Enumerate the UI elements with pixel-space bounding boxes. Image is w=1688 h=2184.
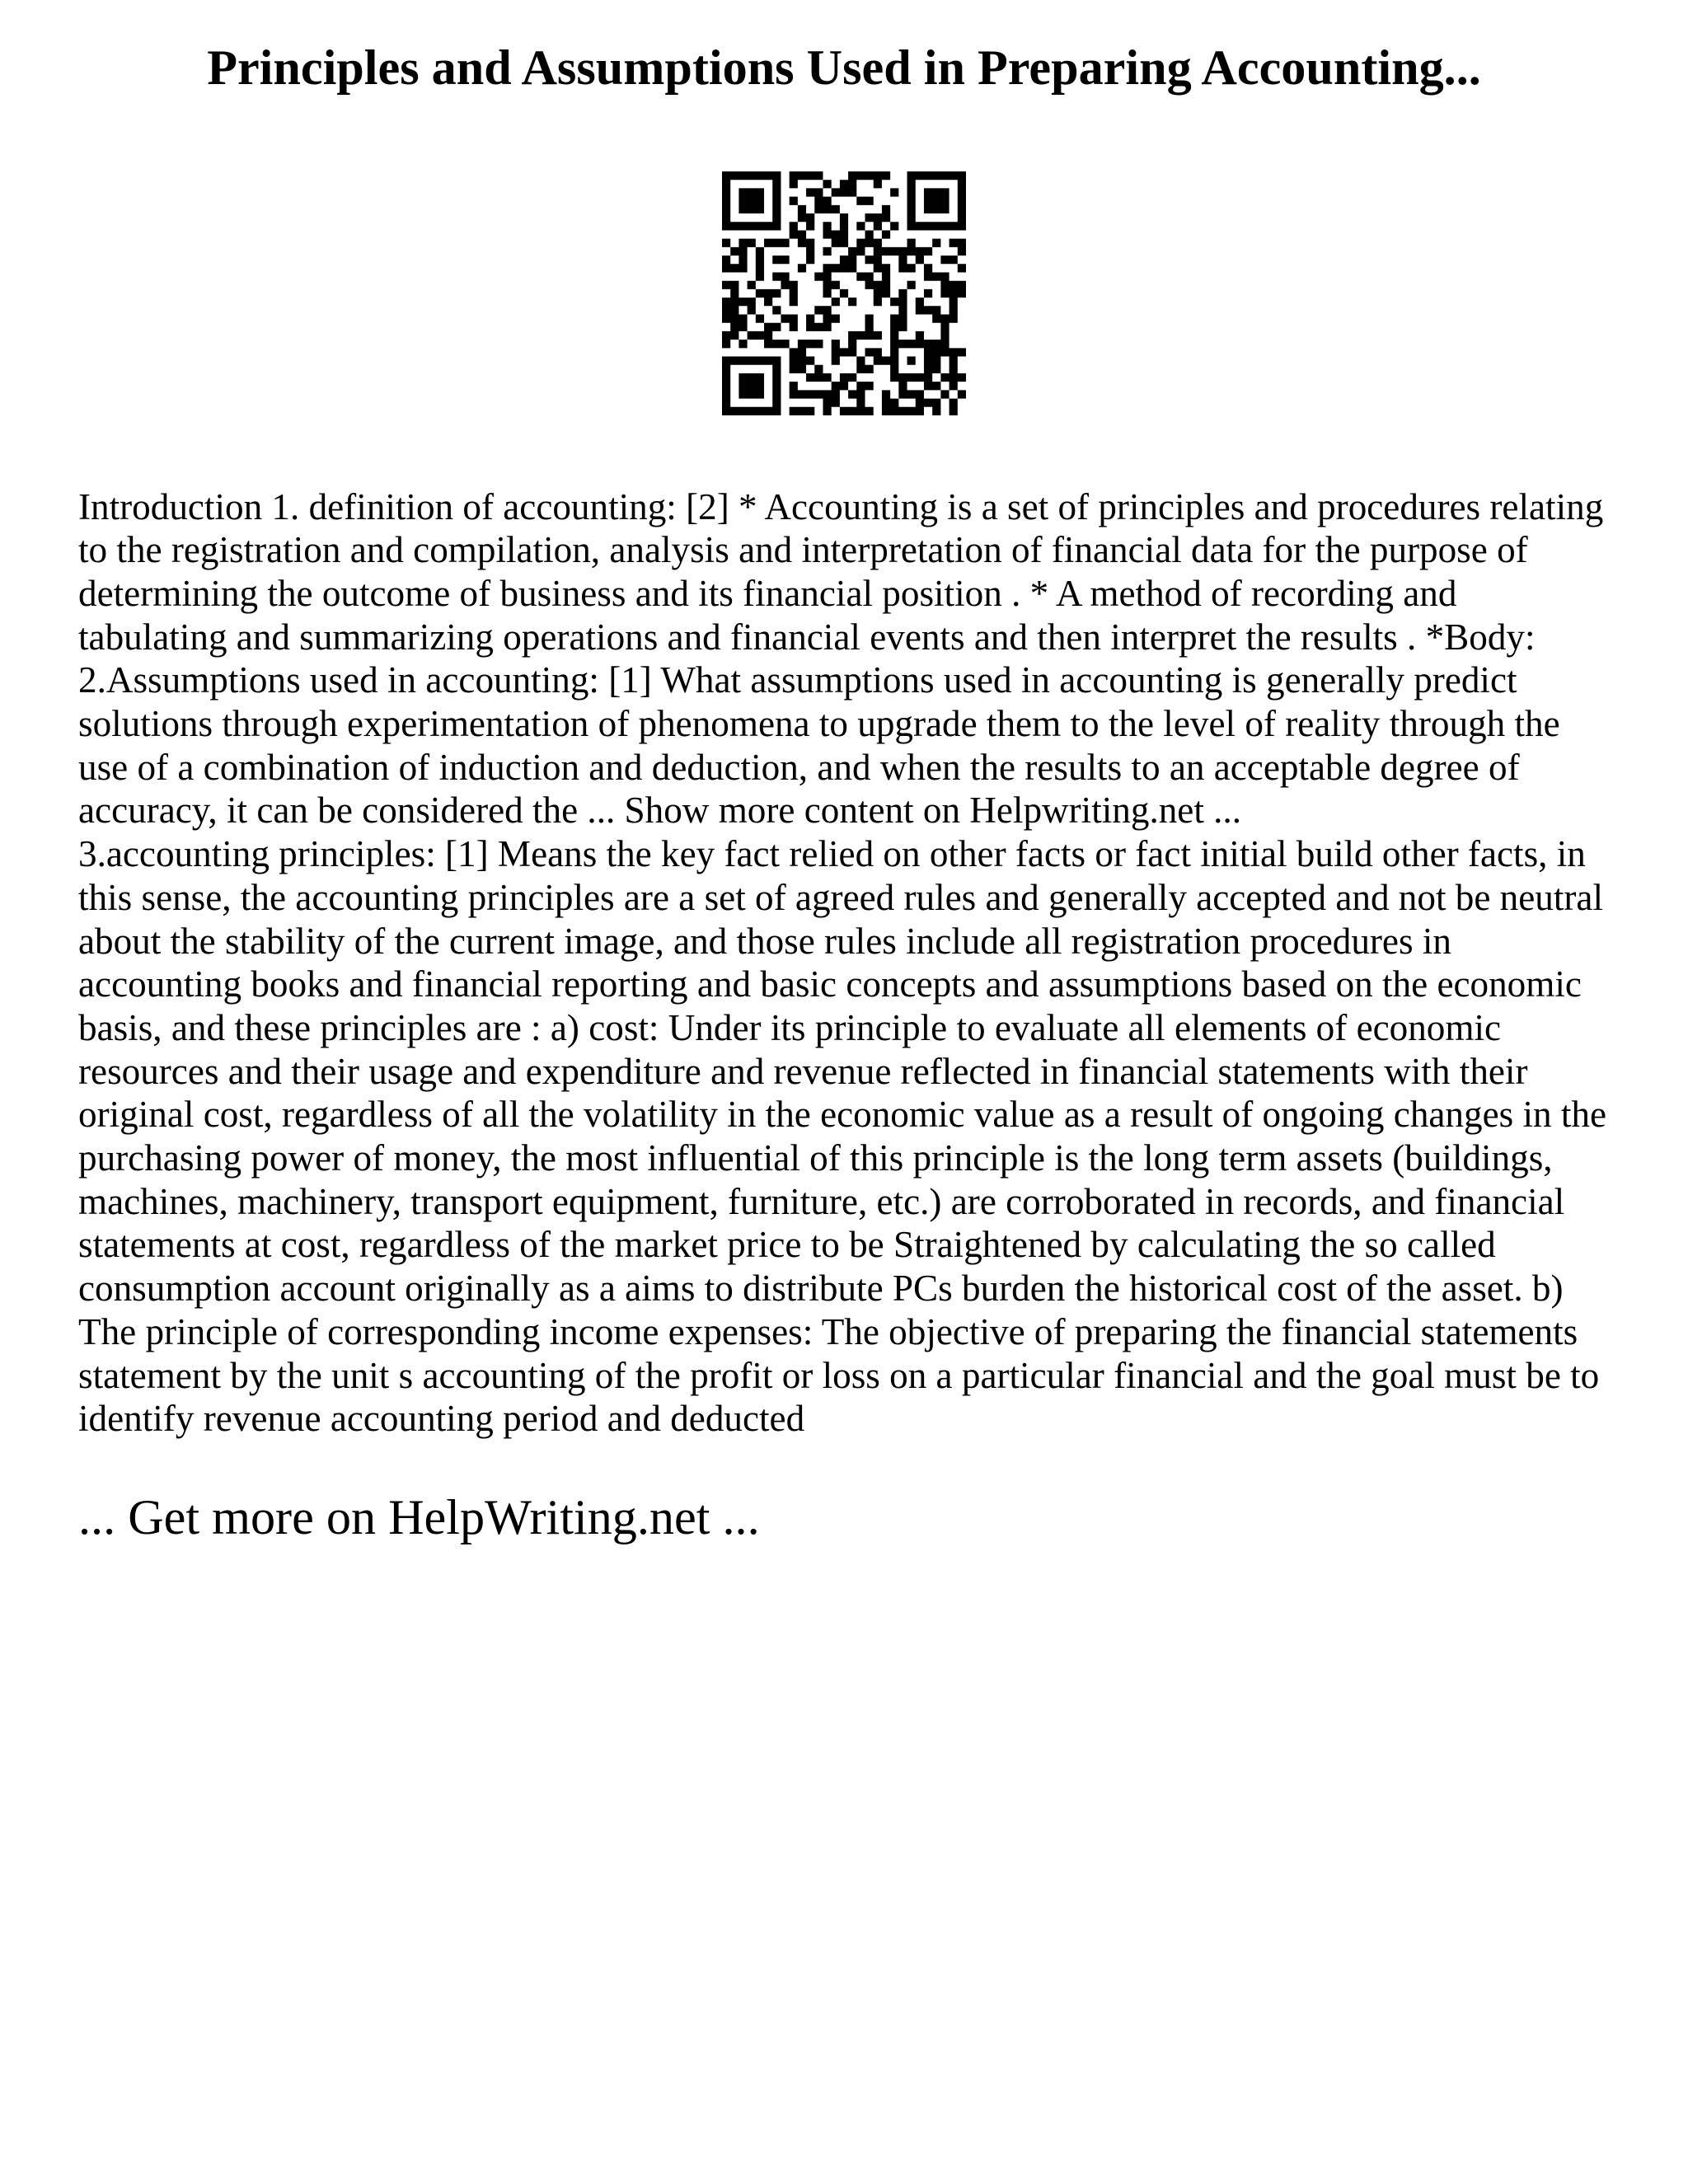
body text: use of a combination of induction and deduction, and when the results to an acceptable degree of xyxy=(78,747,1520,788)
body text: The principle of corresponding income expenses: The objective of preparing the financial statements xyxy=(78,1311,1578,1352)
body text: basis, and these principles are : a) cost: Under its principle to evaluate all elements of economic xyxy=(78,1007,1501,1048)
body text: 3.accounting principles: [1] Means the key fact relied on other facts or fact initial build other facts, in xyxy=(78,833,1586,874)
body text: statements at cost, regardless of the market price to be Straightened by calculating the so called xyxy=(78,1224,1496,1265)
body text: solutions through experimentation of phenomena to upgrade them to the level of reality through the xyxy=(78,703,1560,744)
body text: 2.Assumptions used in accounting: [1] What assumptions used in accounting is generally predict xyxy=(78,659,1517,701)
body text: original cost, regardless of all the volatility in the economic value as a result of ongoing changes in the xyxy=(78,1094,1606,1135)
body text: this sense, the accounting principles are a set of agreed rules and generally accepted and not be neutral xyxy=(78,877,1603,918)
body text xyxy=(78,486,1606,1439)
body text: statement by the unit s accounting of the profit or loss on a particular financial and the goal must be to xyxy=(78,1355,1599,1396)
call to action: ... Get more on HelpWriting.net ... xyxy=(78,1490,760,1544)
body text: purchasing power of money, the most influential of this principle is the long term assets (buildings, xyxy=(78,1137,1553,1179)
body text: consumption account originally as a aims to distribute PCs burden the historical cost of the asset. b) xyxy=(78,1268,1564,1309)
body text: machines, machinery, transport equipment, furniture, etc.) are corroborated in records, and financial xyxy=(78,1181,1564,1222)
body text: accuracy, it can be considered the ... Show more content on Helpwriting.net ... xyxy=(78,790,1241,831)
body text: about the stability of the current image, and those rules include all registration procedures in xyxy=(78,921,1451,962)
body text: tabulating and summarizing operations and financial events and then interpret the results . *Body: xyxy=(78,616,1536,658)
body text: to the registration and compilation, analysis and interpretation of financial data for the purpose of xyxy=(78,529,1528,570)
title: Principles and Assumptions Used in Preparing Accounting... xyxy=(207,40,1481,96)
body text: Introduction 1. definition of accounting: [2] * Accounting is a set of principles and procedures relating xyxy=(78,486,1603,527)
body text: accounting books and financial reporting and basic concepts and assumptions based on the economic xyxy=(78,963,1582,1005)
body text: identify revenue accounting period and deducted xyxy=(78,1398,804,1439)
body text: determining the outcome of business and its financial position . * A method of recording and xyxy=(78,573,1456,614)
QR code xyxy=(722,171,966,415)
body text: resources and their usage and expenditure and revenue reflected in financial statements with their xyxy=(78,1051,1528,1092)
